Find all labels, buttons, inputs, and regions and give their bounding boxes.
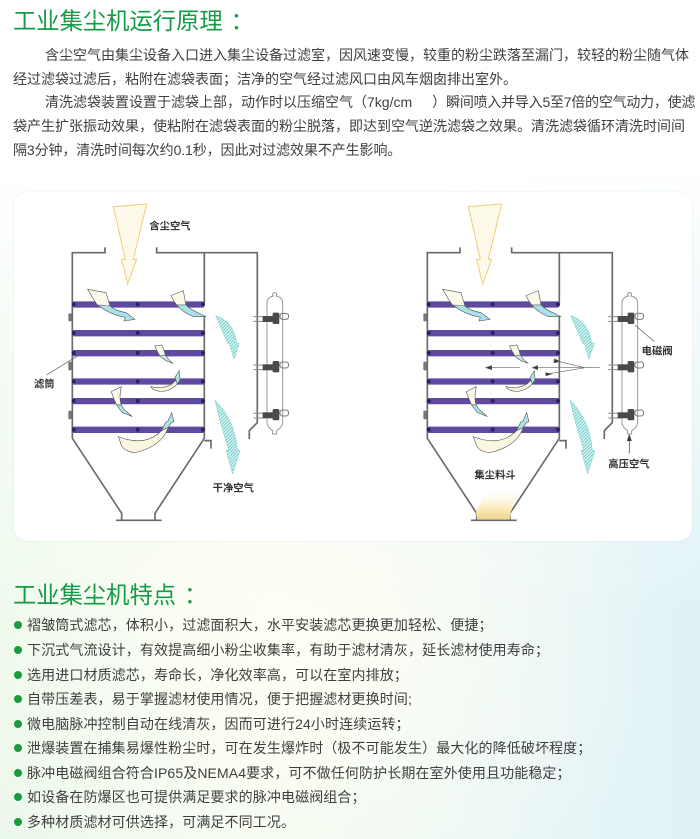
filter cartridges: [423, 301, 560, 433]
feature item 5: 微电脑脉冲控制自动在线清灰，因而可进行24小时连续运转；: [27, 716, 410, 732]
arrows: air flow through filters: [88, 289, 206, 453]
filter cartridges: [68, 301, 205, 433]
panel: diagrams: [34, 204, 673, 522]
leader line: filter cartridge: [47, 353, 82, 375]
arrows: clean air outflow: [215, 316, 240, 474]
arrows: clean air outflow: [570, 316, 595, 474]
text block: principle description: 隔3分钟，清洗时间每次约0.1秒，因此对过滤效果不产生影响。: [13, 142, 401, 158]
filter housing: [72, 247, 257, 520]
leader line: solenoid valve: [635, 325, 654, 342]
diagram: normal filtering: [34, 204, 289, 520]
label: solenoid valve: 电磁阀: [642, 345, 673, 358]
label: dusty air: 含尘空气: [149, 219, 191, 232]
arrow: dusty air inlet: [113, 204, 147, 284]
arrow: high pressure air: [627, 435, 631, 453]
label: high pressure air: 高压空气: [608, 458, 650, 471]
text block: principle description: [13, 47, 695, 158]
diagram: pulse cleaning: [423, 204, 673, 520]
arrow: dusty air inlet: [468, 204, 502, 284]
heading: features: 工业集尘机特点 ：: [13, 582, 207, 608]
label: clean air: 干净空气: [213, 481, 255, 494]
text block: principle description: 经过滤袋过滤后，粘附在滤袋表面；洁净的空气经过滤风口由风车烟囱排出室外。: [13, 71, 517, 87]
text block: principle description: 清洗滤袋装置设置于滤袋上部，动作时以压缩空气（7kg/cm ）瞬间喷入并导入5至7倍的空气动力，使滤: [45, 94, 695, 110]
feature item 7: 脉冲电磁阀组合符合IP65及NEMA4要求，可不做任何防护长期在室外使用且功能稳定；: [27, 765, 571, 781]
arrows: reverse pulse jet: [486, 359, 600, 376]
label: dust hopper: 集尘料斗: [474, 469, 516, 482]
feature item 1: 褶皱筒式滤芯，体积小，过滤面积大，水平安装滤芯更换更加轻松、便捷；: [27, 617, 493, 633]
feature list: [14, 617, 591, 830]
arrows: air flow through filters: [443, 289, 561, 453]
feature item 3: 选用进口材质滤芯，寿命长，净化效率高，可以在室内排放；: [27, 667, 408, 683]
feature item 8: 如设备在防爆区也可提供满足要求的脉冲电磁阀组合；: [27, 789, 366, 805]
panel: diagrams background: [14, 192, 692, 541]
feature item 9: 多种材质滤材可供选择，可满足不同工况。: [27, 814, 295, 830]
feature item 2: 下沉式气流设计，有效提高细小粉尘收集率，有助于滤材清灰，延长滤材使用寿命；: [27, 642, 549, 658]
text block: principle description: 袋产生扩张振动效果，使粘附在滤袋表面的粉尘脱落，即达到空气逆洗滤袋之效果。清洗滤袋循环清洗时间间: [13, 118, 685, 134]
label: filter cartridge: 滤筒: [34, 377, 55, 390]
filter housing: [427, 247, 612, 520]
heading: operating principle: 工业集尘机运行原理 ：: [13, 8, 254, 34]
collected dust: [476, 492, 518, 519]
feature item 4: 自带压差表，易于掌握滤材使用情况，便于把握滤材更换时间;: [27, 691, 412, 707]
pulse valve manifold: [253, 292, 289, 434]
feature item 6: 泄爆装置在捕集易爆性粉尘时，可在发生爆炸时（极不可能发生）最大化的降低破坏程度；: [27, 740, 591, 756]
text block: principle description: 含尘空气由集尘设备入口进入集尘设备过滤室，因风速变慢，较重的粉尘跌落至漏门，较轻的粉尘随气体: [45, 47, 689, 63]
pulse valve manifold: [608, 292, 644, 434]
